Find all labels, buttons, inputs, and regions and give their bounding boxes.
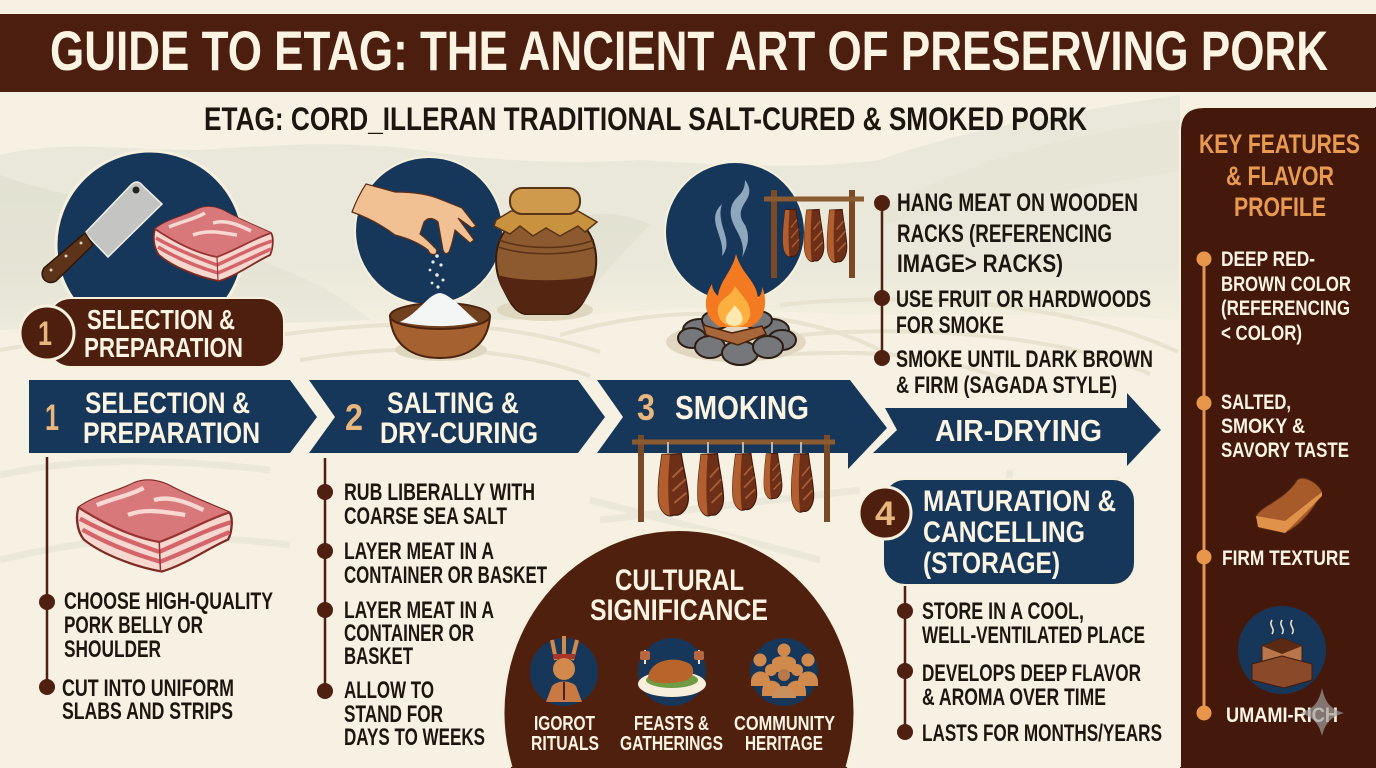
list: salting steps: CONTAINER OR BASKET [344,562,547,589]
list: selection steps: SHOULDER [64,636,161,663]
panel: cultural significance: HERITAGE [745,733,823,755]
arrow: air-drying [873,393,1161,466]
panel: cultural significance: FEASTS & [634,713,709,735]
step 1 label pill: SELECTION & [87,304,235,335]
list: salting steps: STAND FOR [344,701,443,728]
chevron step 3: 3 [637,387,655,428]
smoking rack with hanging meat [632,435,835,522]
panel: key features and flavor profile: & FLAVOR [1226,161,1334,191]
step list: hang and smoke [874,189,1153,399]
step 1 illustration: cleaver and pork [42,151,273,339]
step 4 label pill: MATURATION & [923,485,1116,518]
step 3 illustration: fire and drying rack [665,162,864,365]
step list: hang and smoke: & FIRM (SAGADA STYLE) [896,372,1117,399]
panel: key features and flavor profile: SALTED, [1221,391,1291,414]
panel: key features and flavor profile: SMOKY & [1221,415,1305,438]
arrow: air-drying: AIR-DRYING [935,413,1102,448]
chevron step 1: 1 [45,397,59,438]
list: selection steps: PORK BELLY OR [64,612,203,639]
pork slab illustration [77,480,232,572]
list: maturation steps: DEVELOPS DEEP FLAVOR [922,660,1141,687]
step 1 label pill: 1 [38,315,52,353]
chevron step 2: SALTING & [387,387,519,420]
list: salting steps [317,458,547,751]
icon: firm pork strip [1256,478,1322,533]
chevron step 2: DRY-CURING [380,417,538,450]
step list: hang and smoke: HANG MEAT ON WOODEN [897,189,1138,217]
list: salting steps: DAYS TO WEEKS [344,724,485,751]
panel: key features and flavor profile: DEEP RED- [1221,248,1315,271]
panel: cultural significance: IGOROT [534,713,595,735]
step 1 label pill: PREPARATION [84,332,243,363]
panel: key features and flavor profile: UMAMI-RICH [1226,704,1338,727]
list: maturation steps [897,586,1162,747]
panel: cultural significance [503,529,855,768]
icon: umami pork stack [1238,606,1326,694]
list: selection steps [39,457,273,725]
panel: key features and flavor profile [1180,107,1376,768]
chevron step 1: PREPARATION [83,417,260,450]
step 4 label pill: (STORAGE) [923,547,1060,580]
panel: cultural significance: GATHERINGS [620,733,723,755]
list: selection steps: CHOOSE HIGH-QUALITY [64,588,273,615]
panel: cultural significance: SIGNIFICANCE [590,594,768,627]
icon: igorot rituals [530,636,598,706]
chevron step 1 [29,380,317,453]
panel: key features and flavor profile: SAVORY TASTE [1221,439,1349,462]
list: salting steps: CONTAINER OR [344,620,474,647]
step list: hang and smoke: SMOKE UNTIL DARK BROWN [896,346,1153,373]
decorative sparkle [1300,688,1344,736]
step 4 label pill: CANCELLING [923,516,1085,549]
list: maturation steps: & AROMA OVER TIME [922,684,1106,711]
chevron step 2: 2 [345,397,363,438]
list: salting steps: LAYER MEAT IN A [344,538,494,565]
list: salting steps: ALLOW TO [344,677,434,704]
list: selection steps: CUT INTO UNIFORM [62,675,234,702]
list: maturation steps: STORE IN A COOL, [922,598,1084,625]
panel: key features and flavor profile: < COLOR) [1221,322,1302,345]
icon: feast [638,638,706,706]
step 4 label pill [859,479,1135,585]
step list: hang and smoke: USE FRUIT OR HARDWOODS [896,286,1151,313]
icon: community [750,638,818,706]
list: maturation steps: LASTS FOR MONTHS/YEARS [922,720,1162,747]
panel: key features and flavor profile: FIRM TEXTURE [1222,547,1350,570]
list: selection steps: SLABS AND STRIPS [62,698,233,725]
list: salting steps: COARSE SEA SALT [344,503,507,530]
step 4 label pill: 4 [875,495,895,533]
panel: cultural significance: CULTURAL [615,564,744,597]
subtitle: ETAG: CORD_ILLERAN TRADITIONAL SALT-CURED & SMOKED PORK [204,101,1087,137]
step 1 label pill [20,298,284,367]
step list: hang and smoke: IMAGE> RACKS) [897,250,1063,278]
list: maturation steps: WELL-VENTILATED PLACE [922,622,1145,649]
step 2 illustration: hand, salt bowl and jar [352,157,597,361]
step list: hang and smoke: RACKS (REFERENCING [897,220,1112,248]
list: salting steps: LAYER MEAT IN A [344,597,494,624]
chevron step 1: SELECTION & [85,387,250,420]
panel: cultural significance: COMMUNITY [734,713,836,735]
chevron step 3 [597,380,887,469]
panel: cultural significance: RITUALS [531,733,599,755]
chevron step 2 [309,380,605,453]
list: salting steps: BASKET [344,643,413,670]
step list: hang and smoke: FOR SMOKE [896,312,1004,339]
chevron step 3: SMOKING [675,389,809,426]
list: salting steps: RUB LIBERALLY WITH [344,479,535,506]
panel: key features and flavor profile: PROFILE [1234,192,1326,222]
